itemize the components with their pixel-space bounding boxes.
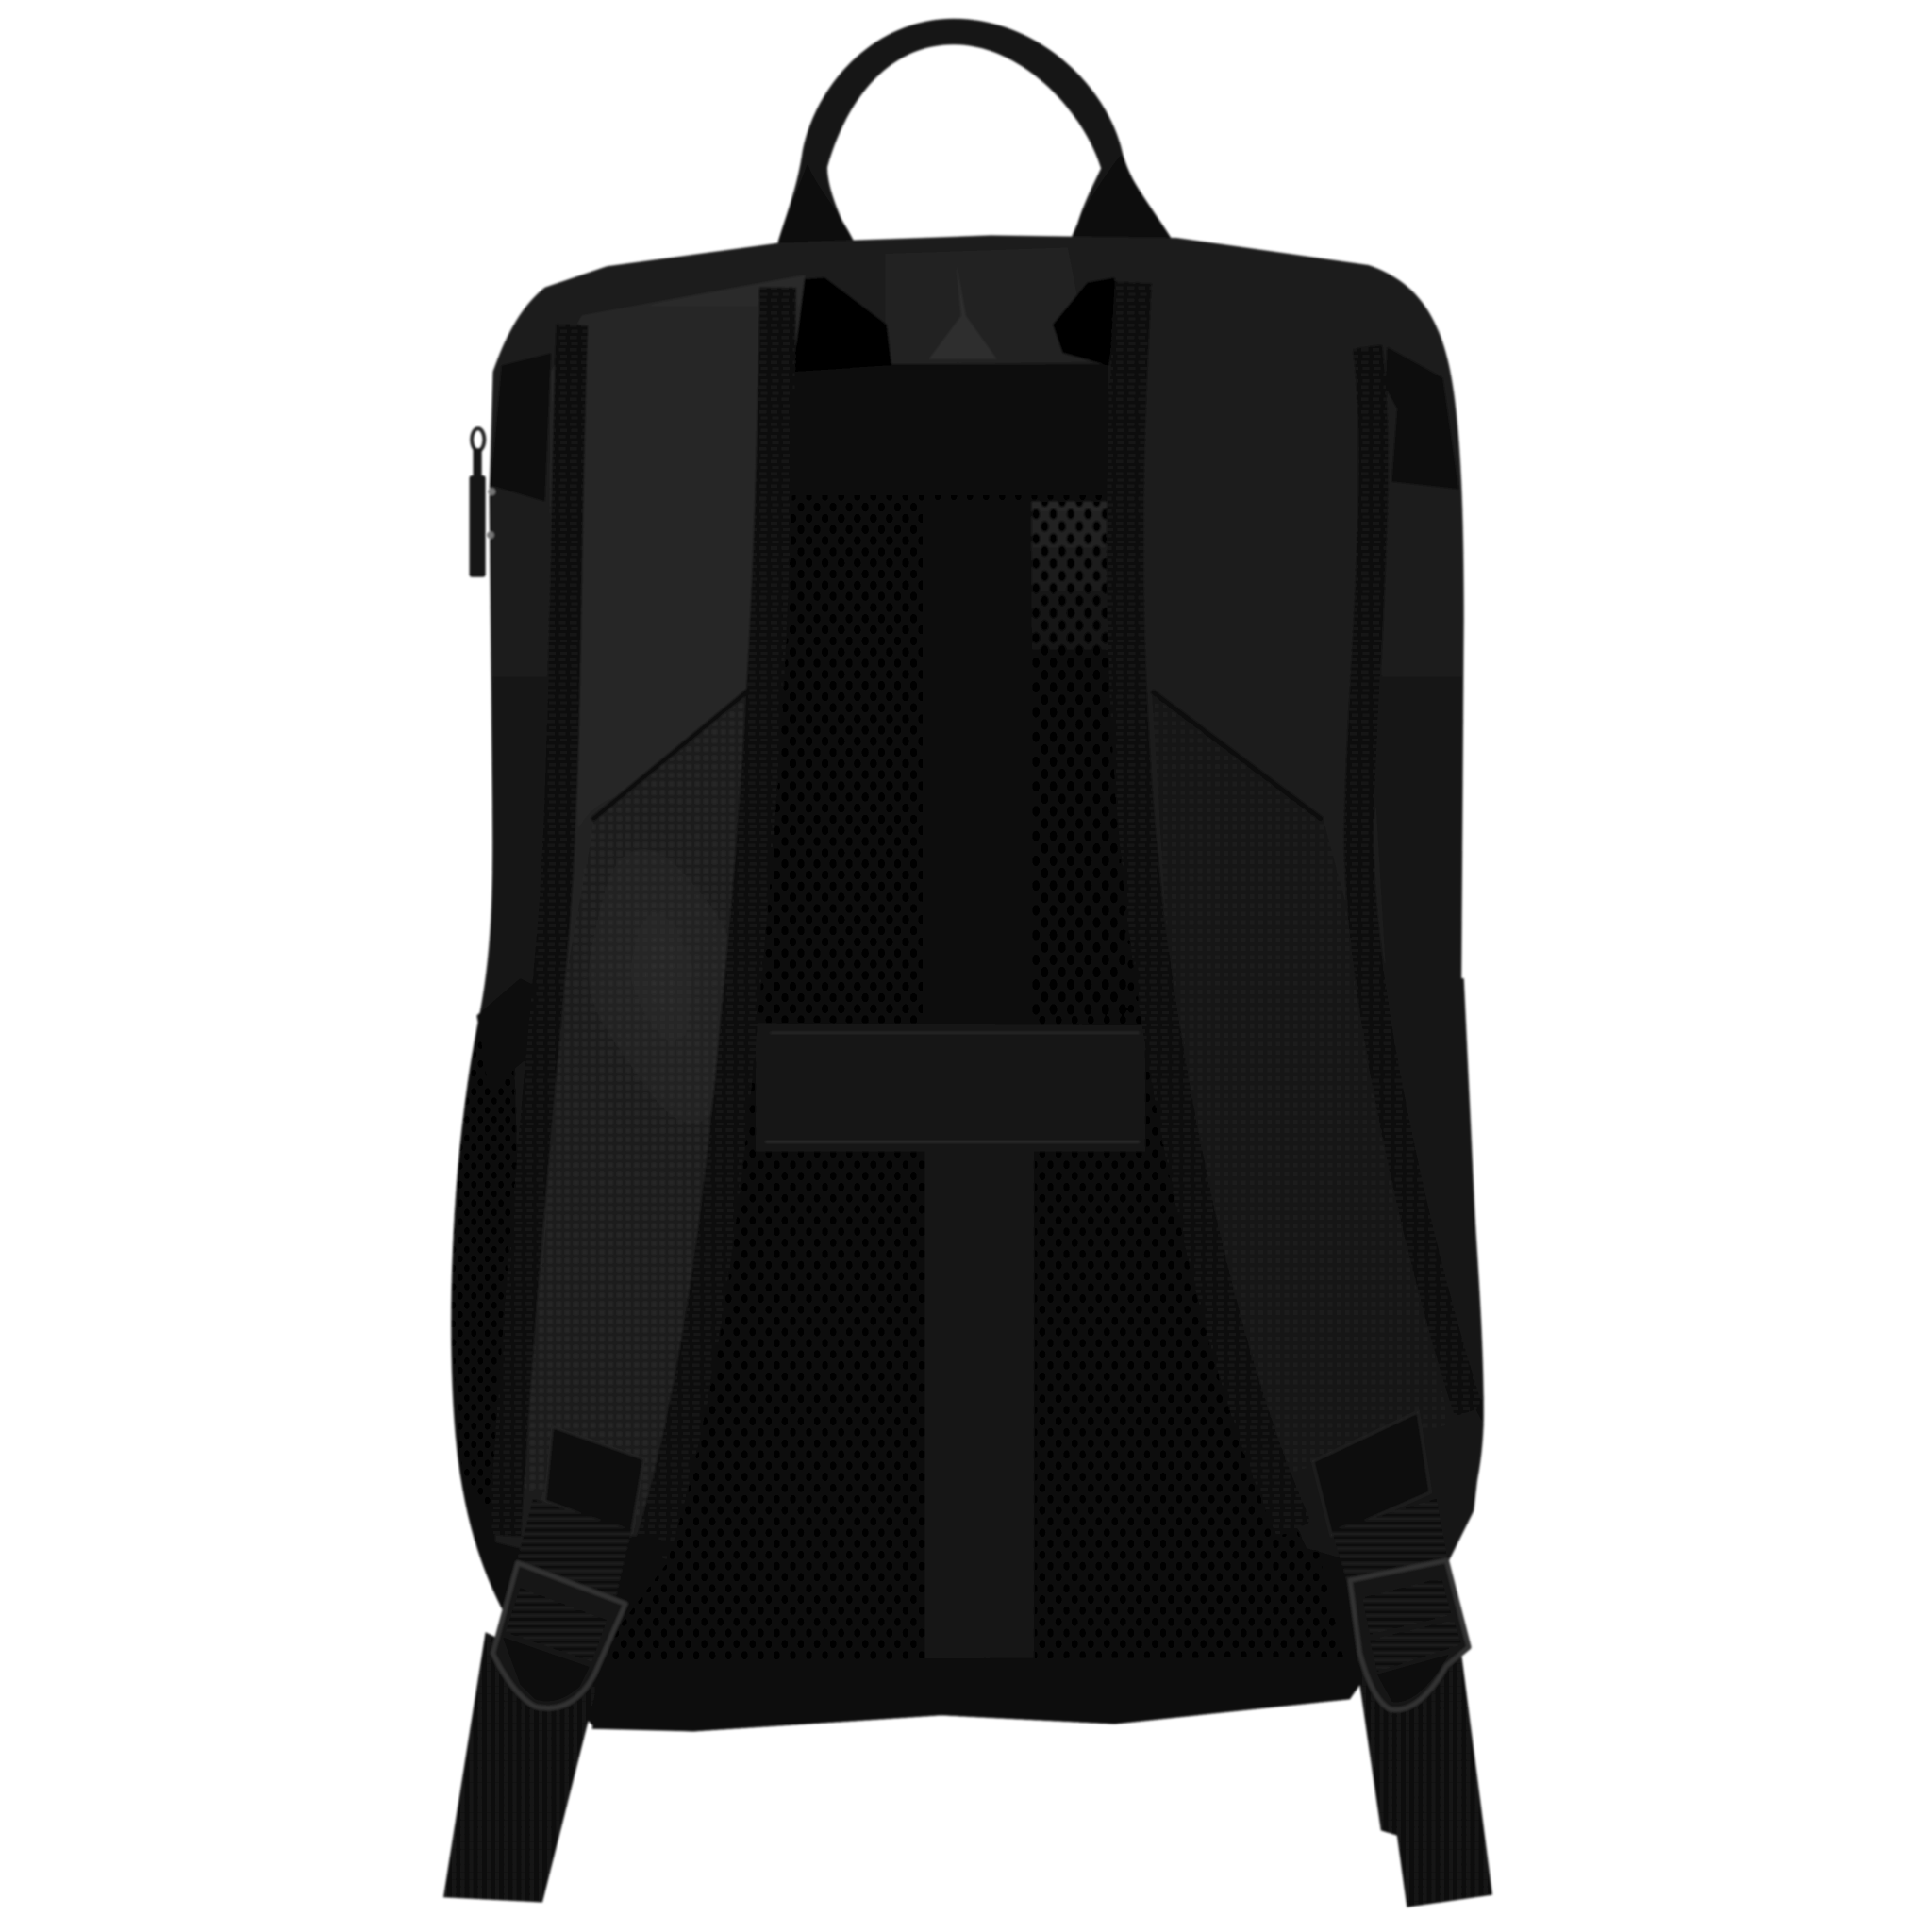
upper mesh shadow	[774, 498, 923, 1030]
top centre fabric crease	[929, 262, 997, 359]
right lower weave	[1152, 691, 1449, 1474]
right webbing above buckle	[1331, 1499, 1449, 1591]
bag body	[451, 235, 1484, 1731]
left strap highlight	[594, 830, 724, 1152]
left diagonal seam	[592, 689, 751, 820]
centre spine lower	[925, 1152, 1034, 1662]
top centre fabric panel	[886, 248, 1090, 365]
left strap gusset	[792, 277, 891, 372]
centre spine upper	[923, 502, 1032, 1028]
open mesh upper right	[1030, 502, 1127, 1016]
webbing top band	[792, 364, 1115, 498]
right inner seam	[1125, 282, 1294, 1529]
right strap pad	[1108, 275, 1484, 1585]
left buckle	[493, 1563, 625, 1708]
right diagonal seam	[1152, 691, 1323, 820]
open mesh shade	[1030, 502, 1127, 1016]
left lower weave	[520, 691, 749, 1524]
right outer seam	[1358, 347, 1469, 1412]
side compartment shadow left	[491, 353, 551, 502]
back mesh panel	[594, 495, 1343, 1659]
left shoulder strap	[495, 275, 891, 1579]
left lower tail shadow	[607, 1536, 675, 1579]
sternum leather strap	[756, 1023, 1145, 1152]
backpack	[443, 19, 1492, 1907]
left end tab	[545, 1426, 644, 1533]
right lower strap	[1357, 1654, 1492, 1907]
side mesh pocket	[452, 1016, 520, 1524]
left pocket hem	[476, 978, 545, 1090]
right buckle	[1350, 1560, 1469, 1709]
right end tab	[1313, 1412, 1430, 1536]
left lower strap	[443, 1632, 597, 1902]
left outer seam	[506, 325, 573, 1536]
top carry handle	[777, 19, 1174, 248]
right strap gusset	[1053, 277, 1121, 369]
zipper pull	[470, 428, 495, 577]
left strap pad	[495, 275, 805, 1573]
right body lower panel	[1387, 978, 1484, 1399]
left webbing above buckle	[514, 1499, 632, 1610]
left inner seam	[650, 288, 777, 1555]
right shoulder strap	[1053, 275, 1484, 1585]
bottom padded panel	[592, 1657, 1350, 1731]
side compartment shadow right	[1381, 347, 1459, 490]
